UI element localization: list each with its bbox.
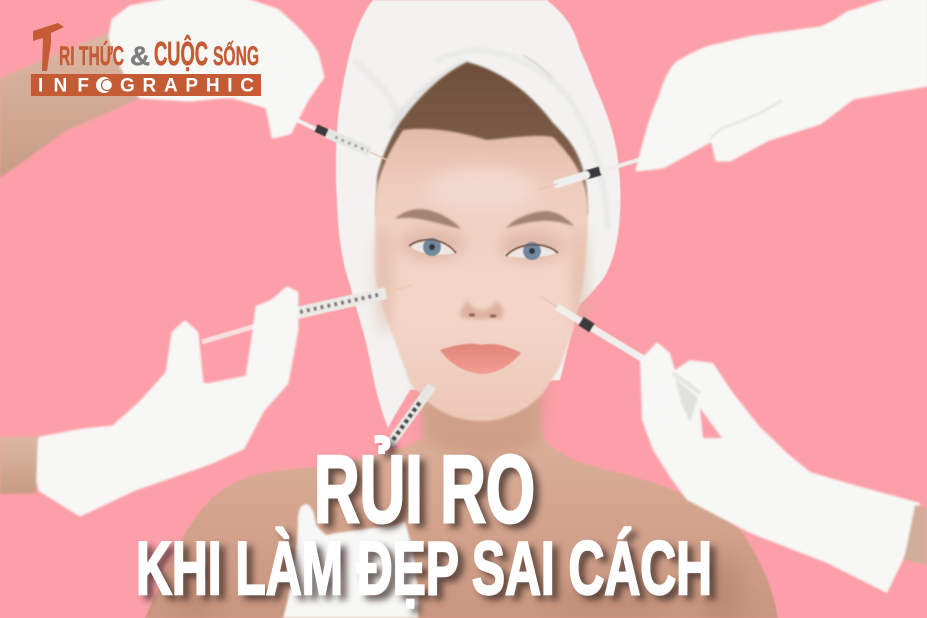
syringe plunger: bottom right xyxy=(673,373,700,393)
title shadow xyxy=(142,440,718,615)
logo band text left: INF xyxy=(38,76,89,96)
glove: bottom left xyxy=(35,288,297,515)
title line 1: RỦI RO xyxy=(314,435,535,543)
logo mark xyxy=(33,23,64,71)
towel xyxy=(336,0,620,428)
syringes xyxy=(202,116,655,444)
glove: centre xyxy=(283,504,418,618)
lips xyxy=(440,344,521,374)
shoulder shading xyxy=(179,555,740,618)
syringe: top left xyxy=(288,116,400,166)
logo: Tri Thuc & Cuoc Song Infographic xyxy=(31,23,261,96)
face shading xyxy=(377,168,587,335)
eyes xyxy=(409,238,558,260)
logo name: RI THỨC xyxy=(59,40,124,71)
logo name: & xyxy=(130,41,150,71)
syringe: middle right xyxy=(540,296,645,360)
face xyxy=(375,129,588,421)
glove: top right xyxy=(637,0,927,170)
syringe: middle left xyxy=(202,285,412,342)
logo band text right: GRAPHIC xyxy=(120,76,254,96)
logo name xyxy=(59,34,259,72)
arm: lower left xyxy=(0,437,38,494)
title xyxy=(136,435,718,615)
neck and shoulders xyxy=(145,380,778,618)
logo name: CUỘC xyxy=(154,34,208,72)
title shadow: RỦI RO xyxy=(320,440,541,548)
woman portrait xyxy=(145,0,778,618)
logo ring icon xyxy=(96,77,112,93)
glove shadow: bottom right xyxy=(675,378,698,422)
logo name: SỐNG xyxy=(213,39,259,71)
syringe: top right xyxy=(538,155,655,190)
glove crease: top right xyxy=(710,100,782,138)
nose xyxy=(461,300,503,320)
arm: lower right xyxy=(904,505,927,565)
glove: top left xyxy=(110,0,323,137)
eyebrows xyxy=(395,209,574,229)
arm: top left xyxy=(0,33,143,178)
glove: bottom right xyxy=(640,342,920,593)
neck shadow xyxy=(418,372,545,459)
syringe: bottom xyxy=(390,386,432,444)
logo band xyxy=(31,74,261,96)
hair xyxy=(376,62,588,215)
